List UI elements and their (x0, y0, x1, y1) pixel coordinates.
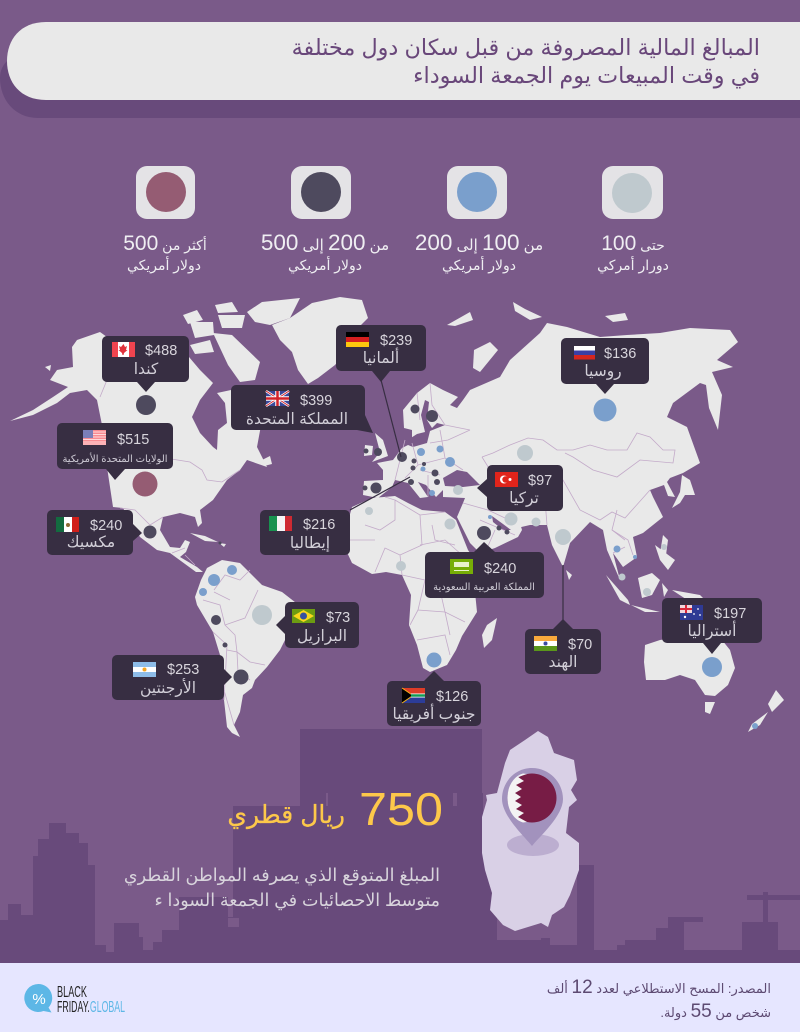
callout: india (525, 619, 601, 674)
map pin (502, 768, 563, 846)
callout: india: الهند (548, 654, 578, 672)
headline: 750 qatari riyal (227, 783, 443, 835)
logo: black friday global: FRIDAY.GLOBAL (57, 999, 125, 1016)
logo: black friday global (24, 984, 125, 1016)
callout: united states (57, 423, 173, 480)
callout: argentina: $253 (167, 662, 199, 678)
landmass: north america (10, 332, 267, 572)
country borders (100, 380, 675, 725)
legend item: over 500: دولار أمريكي (127, 256, 201, 274)
callout: canada: $488 (145, 343, 177, 359)
pin shadow (507, 834, 559, 856)
title text: في وقت المبيعات يوم الجمعة السوداء (413, 63, 760, 89)
callout: south africa: $126 (436, 689, 468, 705)
landmass: greenland (272, 297, 368, 384)
banner shadow (0, 60, 800, 118)
legend item: up to 100: دورار أمركي (597, 256, 669, 274)
description text (124, 865, 440, 911)
callout: australia: $197 (714, 606, 746, 622)
callout: australia (662, 598, 762, 654)
callout: australia: أستراليا (688, 620, 736, 640)
callout: united states: $515 (117, 432, 149, 448)
qatar map with pin (482, 731, 579, 931)
callout: saudi arabia (425, 542, 544, 598)
callout: brazil (276, 602, 359, 648)
landmass: australia (644, 637, 735, 696)
logo: black friday global: % (32, 991, 46, 1008)
callout: canada (102, 336, 189, 392)
legend item: up to 100 (597, 166, 669, 274)
landmass: islands (331, 302, 712, 612)
legend item: up to 100: حتى 100 (601, 232, 665, 255)
headline: 750 qatari riyal: 750 (359, 783, 443, 835)
callout: mexico: $240 (90, 518, 122, 534)
headline: 750 qatari riyal: ريال قطري (227, 801, 345, 829)
callout: saudi arabia: $240 (484, 561, 516, 577)
legend item: over 500: أكثر من 500 (123, 232, 207, 255)
callout: turkey: تركيا (509, 490, 539, 507)
title text (292, 35, 760, 89)
qatar flag circle (508, 774, 556, 822)
legend item: 200 to 500: دولار أمريكي (288, 256, 362, 274)
seas: black sea, baltic, gulf (403, 400, 511, 530)
landmass: africa (345, 496, 492, 672)
description text: المبلغ المتوقع الذي يصرفه المواطن القطري (124, 865, 440, 886)
callout: argentina (112, 655, 232, 700)
callout: russia: روسيا (584, 363, 622, 381)
callout: germany (336, 325, 426, 382)
callout: united kingdom (231, 385, 373, 433)
callout: italy: إيطاليا (290, 535, 330, 552)
banner (7, 22, 800, 100)
callout: india: $70 (568, 637, 592, 653)
callout: canada: كندا (134, 361, 159, 378)
source note: شخص من 55 دولة. (660, 1001, 771, 1022)
callout: south africa (387, 671, 481, 726)
legend item: 200 to 500: من 200 إلى 500 (261, 230, 389, 255)
legend item: 200 to 500 (261, 166, 389, 274)
description text: متوسط الاحصائيات في الجمعة السودا ء (154, 890, 440, 911)
callout: italy (260, 510, 350, 555)
world map (10, 297, 784, 737)
title banner (0, 22, 800, 118)
landmass: madagascar (482, 618, 497, 648)
callout: germany: $239 (380, 333, 412, 349)
city skyline background (0, 729, 800, 963)
callout: saudi arabia: المملكة العربية السعودية (433, 582, 535, 593)
callout: united kingdom: المملكة المتحدة (246, 411, 348, 428)
callout: brazil: $73 (326, 610, 350, 626)
callout: turkey (477, 465, 563, 511)
landmass: eurasia (363, 323, 738, 580)
callout: south africa: جنوب أفريقيا (392, 703, 476, 723)
callout: united states: الولايات المتحدة الأمريكية (62, 452, 168, 465)
landmass: canadian arctic islands (45, 298, 300, 466)
title text: المبالغ المالية المصروفة من قبل سكان دول مختلفة (292, 35, 760, 61)
callout: argentina: الأرجنتين (140, 678, 196, 697)
callout: mexico (47, 510, 142, 555)
callout: turkey: $97 (528, 473, 552, 489)
legend item: 100 to 200 (415, 166, 543, 274)
source note: المصدر: المسح الاستطلاعي لعدد 12 ألف (547, 977, 771, 998)
leader lines (350, 380, 563, 622)
callout: russia: $136 (604, 346, 636, 362)
callout: russia (561, 338, 649, 394)
callout: united kingdom: $399 (300, 393, 332, 409)
legend item: 100 to 200: من 100 إلى 200 (415, 230, 543, 255)
landmass: south america (195, 560, 300, 737)
map of qatar (482, 731, 579, 931)
callout: germany: ألمانيا (363, 347, 399, 367)
legend item: over 500 (123, 166, 207, 274)
logo: black friday global: BLACK (57, 984, 87, 1001)
callout: italy: $216 (303, 517, 335, 533)
legend item: 100 to 200: دولار أمريكي (442, 256, 516, 274)
landmass: tasmania and new zealand (705, 690, 784, 732)
callout: mexico: مكسيك (67, 534, 115, 551)
landmass: caribbean (190, 533, 226, 547)
data dots (132, 395, 758, 729)
callout: brazil: البرازيل (297, 628, 347, 645)
source note (547, 977, 771, 1022)
legend (123, 166, 669, 274)
footer bar (0, 963, 800, 1032)
